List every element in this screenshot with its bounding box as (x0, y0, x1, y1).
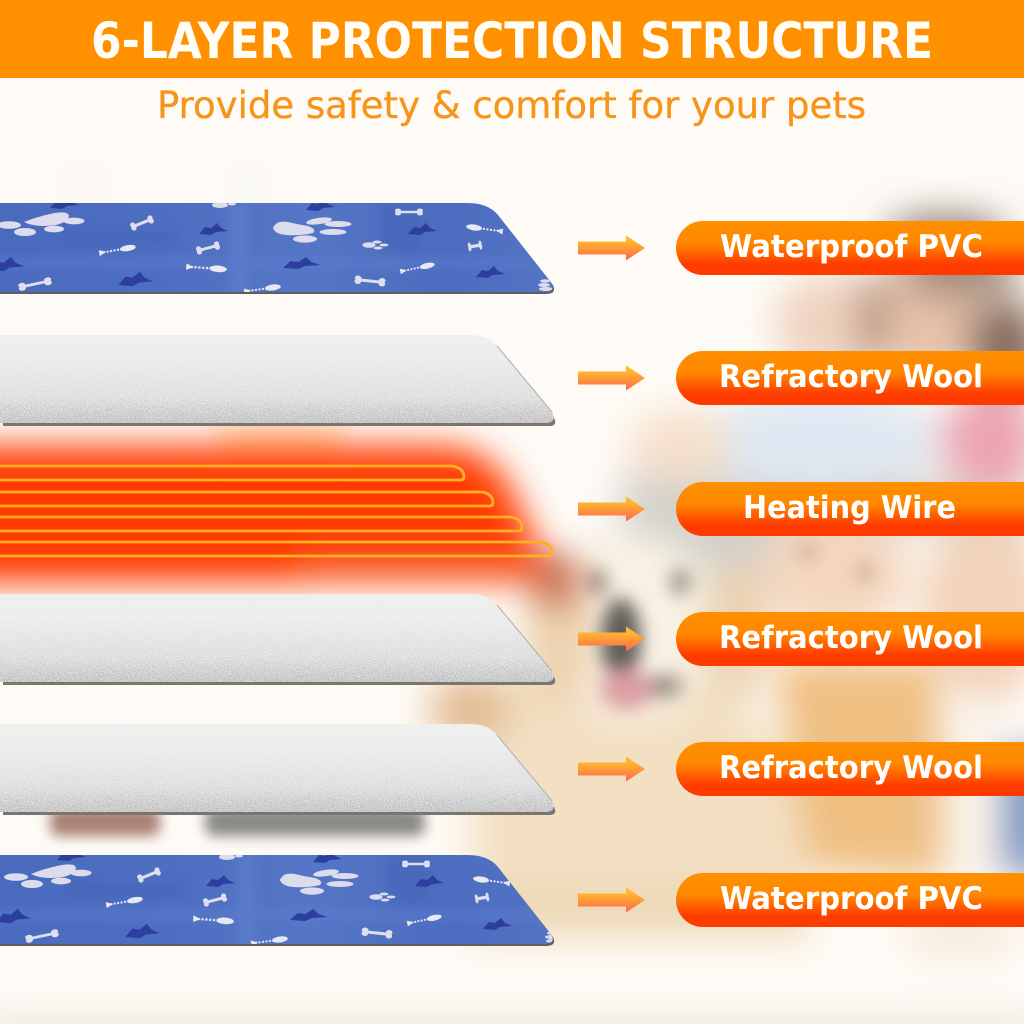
label pill: Refractory Wool: Refractory Wool (719, 620, 983, 656)
label pill: Refractory Wool (676, 351, 1024, 405)
subtitle: Provide safety & comfort for your pets (157, 84, 866, 127)
label pill: Waterproof PVC: Waterproof PVC (720, 881, 983, 917)
label pill: Waterproof PVC (676, 221, 1024, 275)
label pill: Heating Wire: Heating Wire (743, 490, 956, 526)
label pill: Waterproof PVC (676, 873, 1024, 927)
title banner (0, 0, 1024, 78)
layer 5: refractory wool mat (0, 724, 555, 815)
arrow 6 (578, 888, 645, 912)
heating wires (0, 466, 552, 556)
arrow 3 (578, 496, 645, 522)
label pill: Refractory Wool: Refractory Wool (719, 359, 983, 395)
heat glow (0, 430, 582, 608)
layer 2: refractory wool mat (0, 335, 555, 426)
arrow 2 (578, 366, 645, 390)
title: 6-LAYER PROTECTION STRUCTURE (91, 12, 933, 70)
layer 3: heating wire with red glow (0, 430, 582, 608)
shadow blobs under layer 5 (50, 808, 425, 836)
label pill: Refractory Wool (676, 742, 1024, 796)
layer 1: waterproof PVC mat (0, 197, 560, 295)
arrow 5 (578, 756, 645, 782)
layer 4: refractory wool mat (0, 594, 555, 685)
arrow 4 (578, 626, 645, 652)
arrow 1 (578, 236, 645, 260)
label pill: Waterproof PVC: Waterproof PVC (720, 229, 983, 265)
layer 6: waterproof PVC mat (0, 849, 567, 947)
label pill: Refractory Wool: Refractory Wool (719, 750, 983, 786)
label pill: Heating Wire (676, 482, 1024, 536)
label pill: Refractory Wool (676, 612, 1024, 666)
